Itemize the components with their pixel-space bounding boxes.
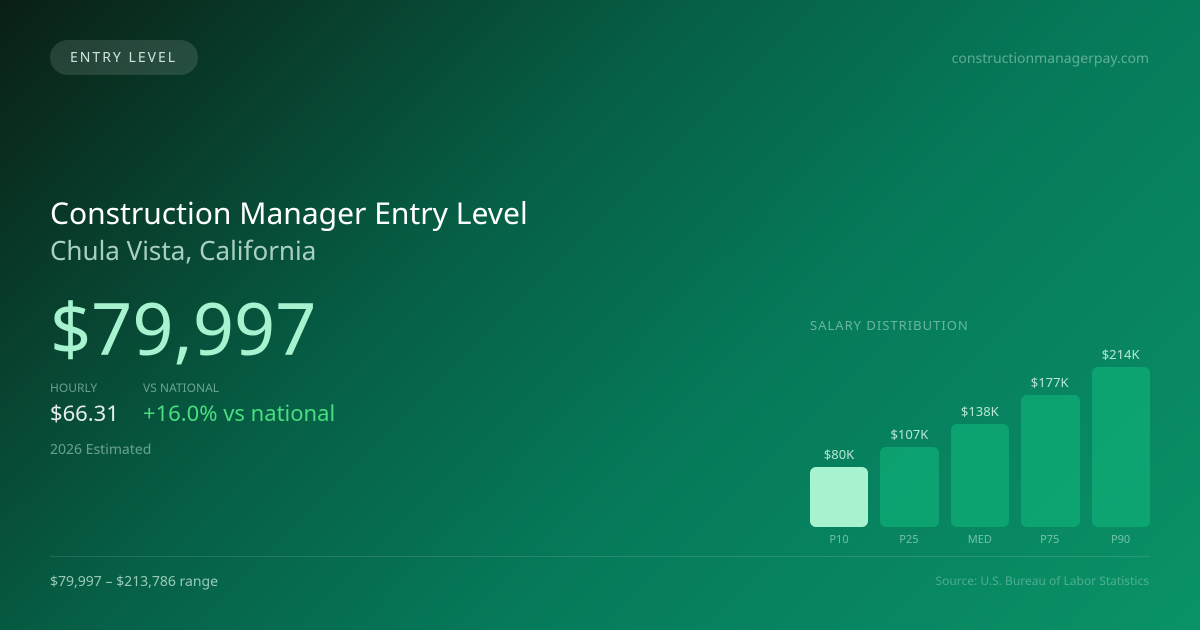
bar group: P10 [810,445,868,547]
median bar [951,424,1009,527]
bar group: P75 [1021,373,1080,547]
data year note: 2026 Estimated [50,440,151,459]
P25 label: P25 [899,532,919,547]
bar group: median [951,402,1009,547]
comparison label: VS NATIONAL [143,379,219,396]
median label: MED [968,532,992,547]
hourly stat [50,379,119,428]
badge: entry level [50,40,198,75]
chart heading: SALARY DISTRIBUTION [810,316,969,334]
P90 value: $214K [1102,345,1139,363]
chart: salary distribution [810,316,1150,547]
bar group: P25 [880,425,939,547]
P10 value: $80K [824,445,854,463]
P75 value: $177K [1031,373,1069,391]
P75 bar [1021,395,1080,527]
P25 value: $107K [890,425,928,443]
median value: $138K [961,402,999,420]
P90 label: P90 [1111,532,1130,547]
salary headline: $79,997 [50,279,316,377]
P90 bar [1092,367,1150,527]
badge: entry level: ENTRY LEVEL [70,48,177,67]
comparison value: +16.0% vs national [143,398,335,428]
bar group: P90 [1092,345,1150,547]
P10 bar [810,467,868,527]
salary range: $79,997 – $213,786 range [50,572,218,591]
P75 label: P75 [1040,532,1059,547]
location subtitle: Chula Vista, California [50,232,316,268]
hourly label: HOURLY [50,379,97,396]
P10 label: P10 [829,532,849,547]
source note: Source: U.S. Bureau of Labor Statistics [936,572,1149,589]
national comparison stat [143,379,335,428]
hourly value: $66.31 [50,398,119,428]
title: Construction Manager Entry Level [50,192,528,233]
site domain: constructionmanagerpay.com [952,49,1149,68]
P25 bar [880,447,939,527]
